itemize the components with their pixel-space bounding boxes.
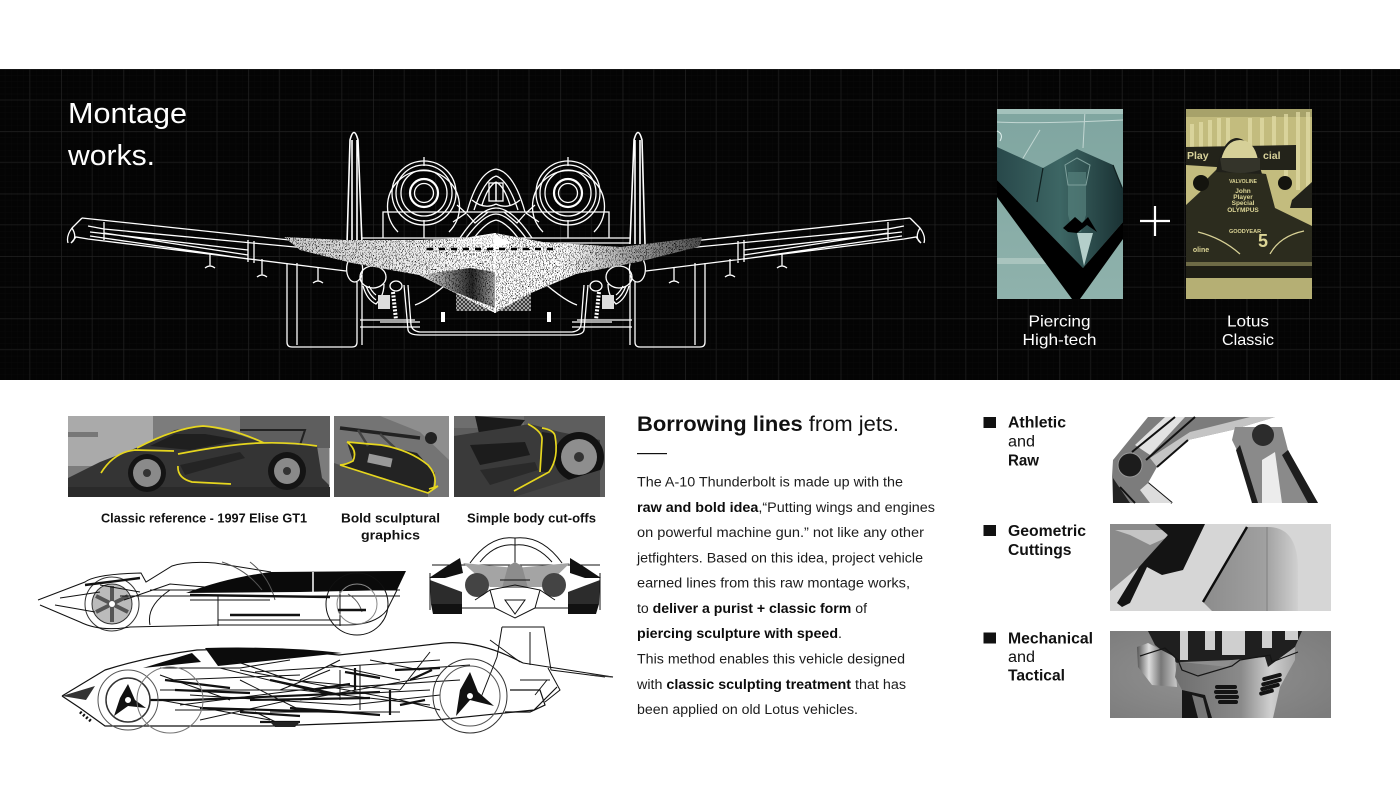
image: piercing high-tech jet, teal duotone (997, 109, 1123, 299)
image: Lotus classic race car, yellow duotone: Play (1187, 150, 1209, 162)
text block: explanation paragraph: on powerful machine gun.” not like any other (637, 525, 924, 541)
text block: explanation paragraph: jetfighters. Based on this idea, project vehicle (636, 550, 923, 566)
divider under heading (637, 453, 667, 454)
text block: explanation paragraph: The A-10 Thunderbolt is made up with the (637, 474, 903, 490)
title: Montage works: Montage (68, 98, 187, 130)
item: Mechanical and Tactical: Tactical (1008, 668, 1065, 684)
image: Lotus classic race car, yellow duotone: GOODYEAR (1229, 229, 1261, 235)
drawing: front view sketch of car (429, 538, 601, 618)
photo: Elise side cut-off with yellow line (454, 416, 605, 497)
caption: Simple body cut-offs: Simple body cut-offs (467, 512, 596, 526)
item: Athletic and Raw: Raw (1008, 452, 1039, 470)
photo: Elise GT1 side view with yellow lines (68, 416, 330, 497)
image: mechanical metal component (1110, 631, 1331, 718)
label: Lotus Classic (1222, 314, 1274, 349)
text block: explanation paragraph: been applied on old Lotus vehicles. (637, 702, 858, 718)
item: Athletic and Raw: and (1008, 434, 1035, 450)
label: Piercing High-tech: High-tech (1022, 332, 1096, 349)
image: robotic limbs (1112, 417, 1318, 503)
image: Lotus classic race car, yellow duotone: VALVOLINE (1229, 179, 1258, 185)
heading: Borrowing lines from jets: Borrowing lines from jets. (637, 413, 899, 436)
image: Lotus classic race car, yellow duotone: Player (1233, 194, 1253, 201)
image: Lotus classic race car, yellow duotone: cial (1263, 150, 1281, 162)
item: Geometric Cuttings: Cuttings (1008, 542, 1072, 559)
caption: Classic reference: Classic reference - 1997 Elise GT1 (101, 512, 307, 526)
label: Piercing High-tech: Piercing (1028, 314, 1090, 330)
item: Athletic and Raw: Athletic (1008, 414, 1066, 432)
illustration: white line drawing of jet front view (68, 132, 924, 347)
photo: Elise rear sculptural graphics with yellow lines (334, 416, 449, 497)
title: Montage works: works. (67, 140, 155, 172)
text block: explanation paragraph (636, 474, 935, 718)
image: Lotus classic race car, yellow duotone (1186, 109, 1312, 299)
item: Mechanical and Tactical: Mechanical (1008, 630, 1093, 648)
image: Lotus classic race car, yellow duotone: OLYMPUS (1227, 207, 1259, 214)
image: Lotus classic race car, yellow duotone: 5 (1258, 231, 1268, 251)
image: Lotus classic race car, yellow duotone: John (1235, 188, 1251, 195)
icon: plus sign (1140, 206, 1170, 236)
item: Mechanical and Tactical (984, 630, 1093, 684)
text block: explanation paragraph: piercing sculpture with speed. (637, 626, 842, 642)
text block: explanation paragraph: earned lines from this raw montage works, (637, 576, 910, 592)
drawing: large wireframe car montage side view (62, 627, 613, 733)
item: Geometric Cuttings (984, 523, 1086, 559)
label: Lotus Classic: Lotus (1227, 314, 1269, 330)
item: Mechanical and Tactical: and (1008, 649, 1035, 666)
text block: explanation paragraph: raw and bold idea,“Putting wings and engines (637, 500, 935, 516)
item: Geometric Cuttings: Geometric (1008, 523, 1086, 540)
image: Lotus classic race car, yellow duotone: oline (1193, 247, 1209, 254)
caption: Bold sculptural graphics: graphics (361, 528, 420, 542)
text block: explanation paragraph: This method enables this vehicle designed (637, 652, 905, 668)
panel: black blueprint band (0, 69, 1400, 380)
item: Athletic and Raw (984, 414, 1066, 470)
image: hand holding device beside cut panel (1110, 524, 1331, 611)
text block: explanation paragraph: to deliver a purist + classic form of (637, 601, 867, 617)
text block: explanation paragraph: with classic sculpting treatment that has (636, 677, 906, 693)
label: Piercing High-tech (1022, 314, 1096, 349)
label: Lotus Classic: Classic (1222, 332, 1274, 349)
caption: Bold sculptural graphics (341, 512, 440, 542)
title: Montage works (67, 98, 187, 172)
caption: Bold sculptural graphics: Bold sculptural (341, 512, 440, 526)
drawing: top car sketch side view (38, 562, 406, 635)
image: Lotus classic race car, yellow duotone: Special (1232, 200, 1255, 207)
